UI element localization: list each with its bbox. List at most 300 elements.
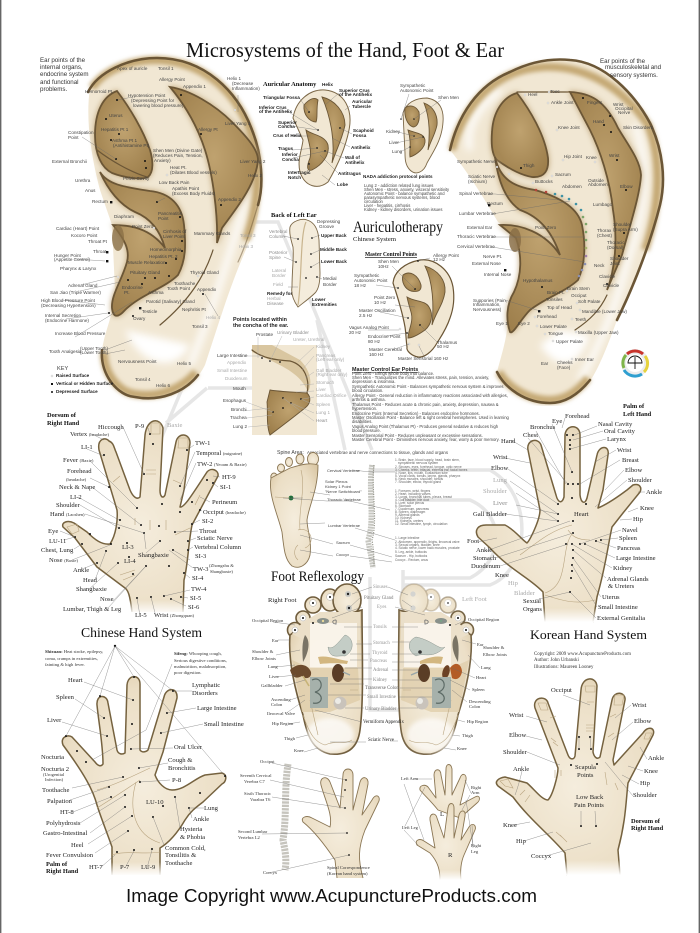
panel: palm of right hand	[41, 645, 244, 876]
labels: Adrenal Glands	[607, 576, 649, 583]
text block: master control ear points: Allergy Point - General reduction in inflammatory reactions associated with allergies,	[352, 393, 508, 398]
text block: master control ear points: hypertension.	[352, 406, 377, 411]
labels: Urethra	[75, 178, 91, 183]
labels: Second Lumbar	[238, 829, 268, 834]
labels: Bronchitis	[168, 765, 196, 772]
spine area caption: Spine Area:	[277, 450, 304, 456]
labels: Fossa	[353, 133, 367, 138]
labels: P-7	[120, 864, 130, 871]
labels: Hepatitis Pt. 2	[149, 254, 178, 259]
labels: Lung 1	[316, 410, 330, 415]
labels: Seventh Cervical	[240, 773, 272, 778]
points and leaders	[262, 763, 350, 873]
labels: Sacrum	[555, 172, 571, 177]
labels: Occipital	[615, 106, 633, 111]
labels: Heart	[68, 677, 83, 684]
foot labels: Ear	[272, 638, 279, 643]
labels: (Lower Tooth)	[80, 350, 108, 355]
labels: (Ischium)	[468, 179, 487, 184]
foot leaders	[273, 587, 480, 752]
text block: master control ear points: blood pressure.	[352, 428, 381, 433]
labels: Knee	[640, 505, 654, 512]
labels: Mouth	[233, 386, 246, 391]
labels: TW-3	[193, 566, 209, 573]
labels: Medial	[323, 276, 337, 281]
spine text list: 4. Sciatic nerve, lower back muscles, prostate	[395, 546, 460, 550]
labels: Intertragic	[288, 170, 311, 175]
labels: Vertex (headache)	[70, 431, 109, 438]
labels: Kidney	[386, 129, 401, 134]
labels: Shen Men	[378, 259, 399, 264]
labels: Right	[471, 785, 482, 790]
labels: Duodenum	[471, 563, 501, 570]
labels: Depressing	[317, 219, 341, 224]
spine text list: 1. Large intestine	[395, 536, 420, 540]
labels: Nocturia	[41, 754, 64, 761]
labels: Pancreas	[316, 353, 336, 358]
concha	[495, 157, 584, 332]
labels: Hip Joint	[564, 154, 583, 159]
labels: Helix 4	[206, 315, 220, 320]
labels: Superior	[278, 120, 297, 125]
labels: Hip	[633, 516, 644, 523]
protocol text: Kidney - kidney disorders, urination issues	[364, 207, 442, 212]
labels: Concha	[282, 157, 299, 162]
leaders	[240, 336, 314, 427]
labels: Prostate	[256, 332, 274, 337]
fossa	[492, 93, 548, 177]
panel: foot reflexology	[252, 450, 507, 754]
labels: External Ear	[467, 225, 493, 230]
text block: master control ear points: blood circulation.	[352, 388, 383, 393]
labels: Helix	[322, 82, 333, 87]
labels: Throat	[199, 528, 217, 535]
text block: master control ear points: Master Control Ear Points	[352, 367, 418, 373]
labels: Cheeks	[557, 360, 573, 365]
labels: Vertebral	[269, 229, 287, 234]
foot labels: Descending	[469, 699, 491, 704]
spine foot labels: Coccyx	[336, 552, 349, 557]
labels: Abdomen	[562, 184, 582, 189]
spine text list: 6. Neck muscles, shoulder, tonsils	[395, 477, 443, 481]
spine area caption: Associated vertebrae and nerve connections to tissue, glands and organs	[307, 450, 448, 455]
labels: Nocturia 2	[41, 766, 69, 773]
panel: korean hand palm	[467, 403, 662, 670]
organs	[290, 618, 352, 710]
labels: Gall Bladder	[473, 511, 508, 518]
spine text list: 4. Gall bladder, bile duct	[395, 498, 429, 502]
labels: Knee	[644, 768, 658, 775]
labels: Thoracic Vertebrae	[457, 234, 496, 239]
labels: Serious digestive conditions,	[174, 658, 227, 664]
spine text list: 3. Sexual organs, bladder, knee	[395, 543, 440, 547]
spine text list: 4. Nose, lips, mouth, Eustachian tube	[395, 471, 448, 475]
labels: Pelvic Cavity	[123, 176, 150, 181]
labels: Liver Yang 1	[225, 121, 251, 126]
text block: master control ear points	[352, 367, 510, 442]
foot labels: Urinary Bladder	[365, 707, 397, 712]
vertebrae dots	[535, 189, 587, 277]
labels: Hysteria	[180, 826, 202, 833]
labels: Upper Palate	[556, 339, 583, 344]
labels: Spleen	[619, 535, 638, 542]
labels: Kidney	[316, 344, 331, 349]
spine foot labels: Kidney 1 Point	[325, 484, 352, 489]
labels: Cardiac (Heart) Point	[56, 226, 100, 231]
labels: High Blood Pressure Point	[41, 298, 96, 303]
labels: Ankle	[476, 547, 492, 554]
labels: Low Back Pain	[159, 180, 190, 185]
labels: Heat Pt.	[170, 165, 187, 170]
icon: logo	[621, 349, 649, 377]
labels: Buttocks	[535, 179, 553, 184]
labels: Cirrhosis of	[163, 229, 187, 234]
foot labels: Sinuses	[373, 585, 388, 590]
labels: Ankle	[513, 766, 529, 773]
labels: Spine	[269, 255, 281, 260]
labels: (Left ear only)	[316, 357, 345, 362]
labels: Ureter, Urethral	[293, 337, 324, 342]
labels: Nose	[100, 596, 114, 603]
labels: Right Hand	[631, 825, 664, 832]
labels: Wrist	[509, 712, 524, 719]
labels: Shangbaxie)	[210, 569, 233, 574]
foot labels: Spleen	[472, 687, 485, 692]
labels: Fever Convulsion	[46, 852, 94, 859]
spine text list: 1. Brain, face, blood supply, head, brain stem,	[395, 458, 460, 462]
labels: Remedy for	[267, 291, 292, 296]
labels: Varabra T6	[250, 797, 271, 802]
labels: Brain Stem	[567, 286, 590, 291]
protocol text: Liver - hepatitis, cirrhosis	[364, 203, 410, 208]
labels: Liver Point	[163, 234, 185, 239]
labels: Joint	[610, 261, 620, 266]
foot labels: Small Intestine	[367, 695, 396, 700]
copyright	[534, 652, 631, 670]
labels: Parotid (Salivary) Gland	[146, 299, 195, 304]
labels: Internal Secretion	[45, 313, 81, 318]
foot labels: Shoulder &	[483, 645, 505, 650]
labels: (Appetite Control)	[54, 257, 90, 262]
labels: Toes	[550, 89, 560, 94]
spine foot labels: Lumbar Vertebrae	[328, 523, 361, 528]
labels: the concha of the ear.	[233, 323, 289, 329]
labels: (Zhongzhu &	[209, 563, 234, 568]
labels: Helix 6	[156, 383, 170, 388]
labels: 160 Hz	[369, 352, 384, 357]
protocol text: NADA addiction protocol points	[363, 174, 433, 179]
labels: Chest, Lung	[41, 547, 74, 554]
labels: SI-6	[188, 604, 200, 611]
labels: Occiput	[571, 293, 587, 298]
left hand L	[420, 764, 479, 818]
labels: Lung 2	[233, 424, 247, 429]
labels: Clavicle	[603, 283, 620, 288]
labels: Auricular Anatomy	[263, 81, 317, 88]
labels: problems.	[40, 86, 67, 93]
foot labels: Stomach	[373, 641, 390, 646]
labels: Top of Head	[547, 305, 572, 310]
spine foot labels	[325, 468, 362, 557]
labels: Tubercle	[352, 104, 371, 109]
spine area caption	[277, 450, 448, 456]
labels: Baxie	[167, 422, 182, 429]
labels: Brain Pt.	[547, 290, 565, 295]
labels: Infection)	[45, 777, 64, 782]
leader lines	[62, 95, 238, 354]
labels: Adrenal Gland	[68, 283, 98, 288]
labels: TW-1	[195, 440, 210, 447]
labels: Left Leg	[402, 825, 419, 830]
foot labels: Ileocecal Valve	[267, 711, 295, 716]
labels: LI-2	[70, 494, 82, 501]
labels: Palm of	[623, 403, 645, 410]
labels: coma, cramps in extremities,	[45, 656, 98, 662]
labels: Shoulder	[503, 749, 528, 756]
labels: HT-7	[89, 864, 103, 871]
labels: Organs	[523, 606, 542, 613]
foot labels: Colon	[271, 702, 283, 707]
concha	[100, 172, 185, 316]
labels: sensory systems.	[610, 72, 658, 79]
labels: Sympathetic Nerve	[457, 159, 496, 164]
foot labels: Occipital Region	[252, 618, 284, 623]
labels: LU-9	[141, 864, 156, 871]
leaders	[404, 779, 473, 848]
labels: Appendix 2	[218, 197, 241, 202]
panel: NADA ear	[363, 83, 459, 212]
labels	[457, 58, 662, 370]
labels: Bladder	[514, 590, 536, 597]
spine illustration	[368, 465, 375, 568]
labels	[267, 212, 347, 307]
foot labels: Elbow Joints	[483, 652, 507, 657]
copyright: Author: John Urbanski	[534, 658, 579, 663]
spine text list: Sacrum - Hip, buttocks	[395, 554, 428, 558]
foot labels: Sciatic Nerve	[368, 738, 394, 743]
labels: Rectum	[487, 201, 503, 206]
spine text list: 12. Small intestine, lymph, circulation	[395, 522, 448, 526]
tragus shading	[509, 228, 521, 252]
panel: master control points	[349, 251, 460, 361]
labels: Gastro-Intestinal	[43, 830, 87, 837]
foot labels: Lung	[481, 665, 491, 670]
labels: Tongue	[548, 331, 564, 336]
labels: Elbow	[509, 732, 526, 739]
labels: Appendix 1	[183, 84, 206, 89]
labels: Nephritis Pt	[182, 307, 206, 312]
ear shape	[88, 57, 262, 398]
labels: Cough &	[168, 757, 193, 764]
labels: Hemorroid Pt.	[85, 89, 113, 94]
spine text list: 10. Kidneys	[395, 516, 412, 520]
key	[51, 366, 114, 394]
labels: Allergy Point	[159, 77, 186, 82]
labels: Apex of auricle	[117, 66, 148, 71]
labels: Ear	[541, 361, 549, 366]
labels: Tonsil 1	[158, 66, 174, 71]
labels: Thigh	[523, 163, 535, 168]
labels: Testicle	[142, 309, 158, 314]
labels: Point	[158, 216, 169, 221]
labels: Concha	[278, 124, 295, 129]
panel: right ear musculoskeletal	[450, 58, 663, 403]
labels	[41, 412, 247, 619]
labels: P-8	[172, 777, 182, 784]
labels: & Ureters	[608, 583, 635, 590]
labels: Homeomorphia	[150, 247, 182, 252]
labels: Bronchus	[530, 424, 556, 431]
labels: Thyroid Gland	[190, 270, 219, 275]
labels: Shoulder	[483, 488, 508, 495]
labels: Occiput	[260, 759, 275, 764]
labels: Sciatic Nerve	[197, 535, 233, 542]
leaders	[62, 646, 225, 868]
watermark	[150, 222, 522, 710]
text block: master control ear points: disabilities.	[352, 419, 372, 424]
labels: Hypothalamus	[523, 278, 553, 283]
labels: Point Zero	[374, 295, 396, 300]
labels: Larynx	[607, 436, 627, 443]
labels: Lower Palate	[540, 324, 567, 329]
labels: Rectum	[92, 199, 108, 204]
protocol text: Lung 2 - addiction related lung issues	[364, 183, 433, 188]
labels: Low Back	[576, 794, 604, 801]
labels: (Decrease	[232, 81, 254, 86]
spine text list: 5. Vocal cords, tonsils, larynx, glands, pharynx	[395, 474, 461, 478]
labels: Apathis Point	[172, 186, 200, 191]
foot labels: Hip Region	[467, 719, 489, 724]
labels: Hand (Laoshen)	[50, 511, 85, 518]
labels: Occiput (headache)	[203, 509, 246, 516]
foot labels: Eyes	[377, 605, 386, 610]
labels: Knee	[586, 155, 597, 160]
hand	[302, 769, 379, 878]
spine foot labels: Solar Plexus	[325, 479, 347, 484]
labels: & Phobia	[180, 834, 205, 841]
labels: Thoracic	[607, 240, 625, 245]
text block: master control ear points: Endocrine Point (Internal Secretion) - Balances endocrine hormones.	[352, 411, 480, 416]
ear	[290, 219, 320, 307]
labels: Wrist (Zhongquan)	[154, 612, 194, 619]
labels: Outside	[588, 178, 604, 183]
protocol text: parasympathetic nervous systems, blood	[364, 195, 441, 200]
labels: External Nose	[472, 261, 501, 266]
labels: Tragus	[278, 146, 294, 151]
labels: Bronchi	[231, 407, 247, 412]
foot labels: Colon	[469, 704, 481, 709]
labels	[401, 776, 482, 859]
hand	[62, 677, 226, 876]
labels: Ankle Joint	[551, 100, 574, 105]
labels: Asthma	[148, 290, 164, 295]
labels: Pharynx & Larynx	[60, 266, 97, 271]
text block: master control ear points: Master Cerebral Point - Diminishes nervous anxiety, fear, worry & poor memory.	[352, 437, 500, 442]
foot labels: Liver	[269, 674, 279, 679]
labels: Hand	[593, 119, 604, 124]
points	[65, 645, 226, 853]
footer copyright: Image Copyright www.AcupunctureProducts.com	[126, 885, 537, 906]
spine text list: 2. Sinuses, eyes, forehead, tongue, optic nerve	[395, 465, 462, 469]
key: Depressed Surface	[56, 389, 98, 394]
labels: internal organs,	[40, 64, 83, 71]
labels: Shangbaxie	[76, 586, 107, 593]
labels: 20 Hz	[349, 330, 362, 335]
spine text list: 8. Spleen, diaphragm	[395, 510, 426, 514]
labels: Appendix	[197, 287, 217, 292]
labels: Allergy Point	[433, 253, 460, 258]
labels: Lung	[392, 149, 403, 154]
labels: (Decreasing Hypertension)	[41, 303, 96, 308]
labels: Small Intestine	[204, 721, 244, 728]
labels: Nerve Pt.	[483, 254, 502, 259]
labels: Spleen	[56, 694, 75, 701]
foot labels: Thigh	[462, 733, 474, 738]
spine text list: 5. Liver, solar plexus	[395, 501, 424, 505]
labels: Lung	[204, 805, 219, 812]
labels: L	[440, 811, 444, 818]
labels: Border	[272, 273, 286, 278]
labels: Auricular	[352, 99, 372, 104]
labels: of the Antihelix	[339, 92, 372, 97]
labels: of the Antihelix	[259, 109, 292, 114]
labels: Allergy Pt	[198, 127, 218, 132]
labels: Vagus Analog Point	[349, 325, 389, 330]
labels: Wall of	[345, 155, 360, 160]
labels: Shoulder	[610, 256, 629, 261]
labels: Throat	[93, 249, 107, 254]
labels: Spleen	[316, 402, 331, 407]
labels: Autonomic Point	[354, 278, 388, 283]
labels: Throat Pt	[88, 239, 108, 244]
labels: Eye	[48, 528, 58, 535]
labels: 12 Hz	[433, 257, 446, 262]
labels: Hiccough	[98, 424, 124, 431]
labels: Wrist	[613, 102, 624, 107]
labels: Pancreatitis	[158, 211, 183, 216]
labels: Hip	[516, 838, 527, 845]
antihelix fold	[160, 250, 213, 325]
leaders	[60, 427, 220, 616]
labels: Inflammation,	[473, 302, 501, 307]
labels: Inflammation)	[232, 86, 260, 91]
labels: Liver	[389, 140, 399, 145]
labels: Sixth Thoracic	[244, 791, 271, 796]
labels: Kocoro Point	[71, 233, 98, 238]
foot labels: Adrenal	[373, 668, 389, 673]
labels: Palm of	[46, 861, 68, 868]
labels: 2.5 Hz	[359, 313, 373, 318]
labels: Urinary Bladder	[277, 330, 309, 335]
labels: LU-10	[146, 799, 164, 806]
panel: left ear internal organs	[40, 57, 266, 398]
text block: master control ear points: Master Sensorial Point - Reduces unpleasant or excessive sensations.	[352, 433, 483, 438]
labels: Tooth Analgesia	[49, 349, 82, 354]
key: KEY	[57, 366, 68, 372]
labels: P-9	[135, 423, 145, 430]
labels: Uterus	[602, 594, 620, 601]
labels: LI-4	[124, 558, 136, 565]
labels: Right Hand	[46, 868, 79, 875]
labels: Nose (Baxie)	[49, 557, 78, 564]
labels: Triangular Fossa	[263, 95, 300, 100]
foot outline	[398, 584, 474, 754]
labels: SI-5	[190, 595, 202, 602]
foot labels: Lung	[268, 664, 278, 669]
labels: Lower Back	[321, 259, 347, 264]
spine	[283, 764, 288, 870]
labels: Sympathetic	[400, 83, 426, 88]
